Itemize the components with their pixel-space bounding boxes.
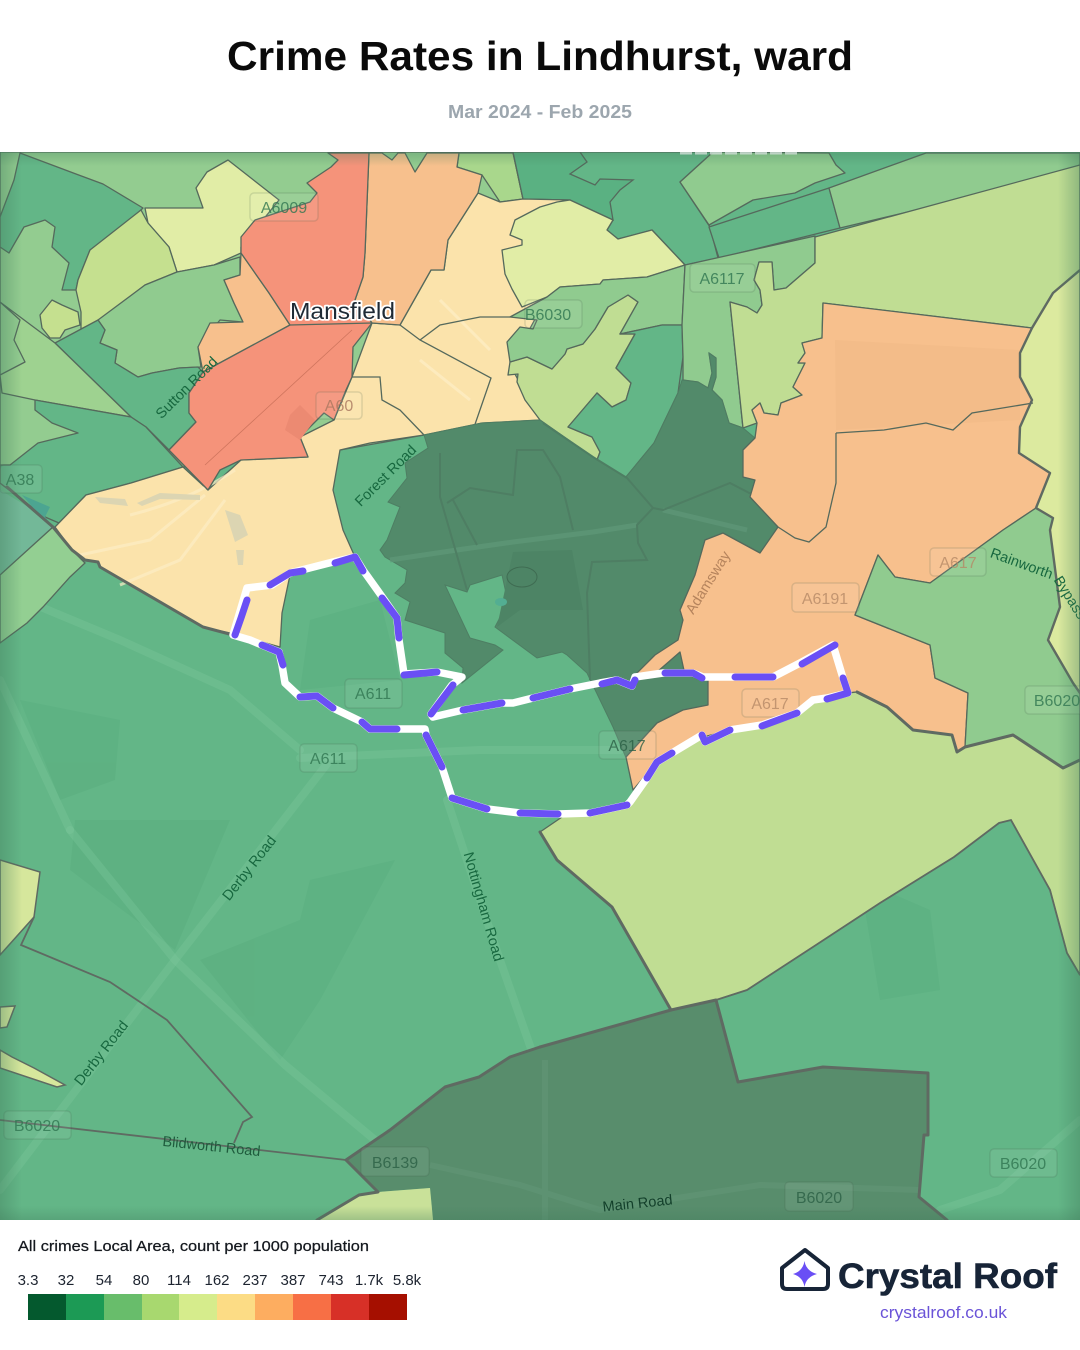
street name labels: Derby Road bbox=[72, 1018, 132, 1089]
street name labels: Nottingham Road bbox=[460, 850, 506, 963]
street name labels: Rainworth bbox=[988, 546, 1055, 583]
legend tick labels: 162 bbox=[204, 1272, 230, 1289]
district polygons north-west bbox=[0, 152, 540, 523]
legend tick labels: 743 bbox=[318, 1272, 344, 1289]
website: crystalroof.co.uk bbox=[880, 1304, 1008, 1322]
choropleth map panel bbox=[0, 152, 1080, 1220]
map base: low crime green bbox=[0, 152, 1080, 1220]
orange district east of Lindhurst bbox=[626, 303, 1050, 790]
subtitle: date range: Mar 2024 - Feb 2025 bbox=[448, 102, 632, 122]
road number badges: A6009 bbox=[261, 200, 307, 217]
road number badges: A617 bbox=[608, 738, 646, 755]
legend tick labels: 3.3 bbox=[18, 1272, 38, 1289]
green district north of town bbox=[513, 152, 718, 265]
map edge vignette bbox=[0, 152, 1080, 1220]
south dark green district bbox=[346, 1000, 947, 1220]
legend tick labels: 32 bbox=[58, 1272, 74, 1289]
legend bbox=[18, 1238, 422, 1320]
legend tick labels bbox=[18, 1272, 422, 1289]
cream district south and east of Mansfield bbox=[55, 193, 600, 647]
road number badges: A6117 bbox=[699, 271, 745, 288]
road number badges: A617 bbox=[751, 696, 789, 713]
Lindhurst ward boundary: white line with purple dashes bbox=[233, 557, 848, 814]
teal river corner and pale wedge on the west edge bbox=[0, 490, 85, 643]
road number badges: B6020 bbox=[14, 1118, 60, 1135]
road number badges: A60 bbox=[325, 398, 353, 415]
road number badges: A38 bbox=[6, 472, 34, 489]
place label: Mansfield: Mansfield bbox=[290, 298, 395, 324]
brand logo: Crystal Roof bbox=[782, 1250, 1057, 1322]
south-west pale fragments bbox=[0, 860, 65, 1087]
legend tick labels: 387 bbox=[280, 1272, 306, 1289]
legend tick labels: 237 bbox=[242, 1272, 268, 1289]
legend tick labels: 1.7k bbox=[355, 1272, 384, 1289]
cream district streets and rail patches bbox=[80, 245, 490, 585]
title: Crime Rates in Lindhurst, ward bbox=[227, 33, 853, 79]
legend tick labels: 114 bbox=[167, 1272, 191, 1289]
road number badges: A611 bbox=[355, 686, 391, 703]
icon: house with star bbox=[782, 1250, 828, 1289]
thick area boundaries bbox=[7, 270, 1080, 1220]
mid green district: Rainworth bbox=[855, 508, 1080, 768]
road number badges: B6020 bbox=[1000, 1156, 1046, 1173]
road number badges: B6020 bbox=[1034, 693, 1080, 710]
clipped place label fragment at map top bbox=[680, 152, 797, 154]
street name labels: Forest Road bbox=[352, 442, 420, 510]
legend colour scale bbox=[28, 1294, 407, 1320]
central district streets bbox=[390, 423, 757, 680]
legend tick labels: 54 bbox=[96, 1272, 112, 1289]
inner cream district boundaries bbox=[352, 317, 510, 435]
street name labels: Blidworth Road bbox=[162, 1134, 261, 1160]
legend title: All crimes Local Area, count per 1000 population bbox=[18, 1238, 369, 1255]
legend tick labels: 5.8k bbox=[393, 1272, 422, 1289]
pale green south-east district bbox=[540, 692, 1080, 1010]
street name labels bbox=[72, 354, 1080, 1216]
road number badges: B6139 bbox=[372, 1155, 418, 1172]
road number badges: B6030 bbox=[525, 307, 571, 324]
legend tick labels: 80 bbox=[133, 1272, 149, 1289]
brand name: Crystal Roof bbox=[838, 1257, 1057, 1296]
map roads bbox=[0, 590, 1080, 1220]
central low crime dark green district bbox=[380, 353, 778, 760]
darker land patches bbox=[20, 600, 940, 1060]
orange districts around the centre bbox=[198, 153, 482, 372]
street name labels: Derby Road bbox=[220, 833, 280, 904]
street name labels: Adamsway bbox=[683, 548, 735, 617]
road number badges: A617 bbox=[939, 555, 977, 572]
road number badges: B6020 bbox=[796, 1190, 842, 1207]
road number badges: A611 bbox=[310, 751, 346, 768]
north-east districts bbox=[502, 152, 1080, 693]
red district: Mansfield centre bbox=[169, 153, 372, 490]
street name labels: Sutton Road bbox=[153, 354, 221, 422]
road number badges bbox=[0, 193, 1080, 1211]
road number badges: A6191 bbox=[802, 591, 848, 608]
street name labels: Main Road bbox=[602, 1192, 673, 1216]
